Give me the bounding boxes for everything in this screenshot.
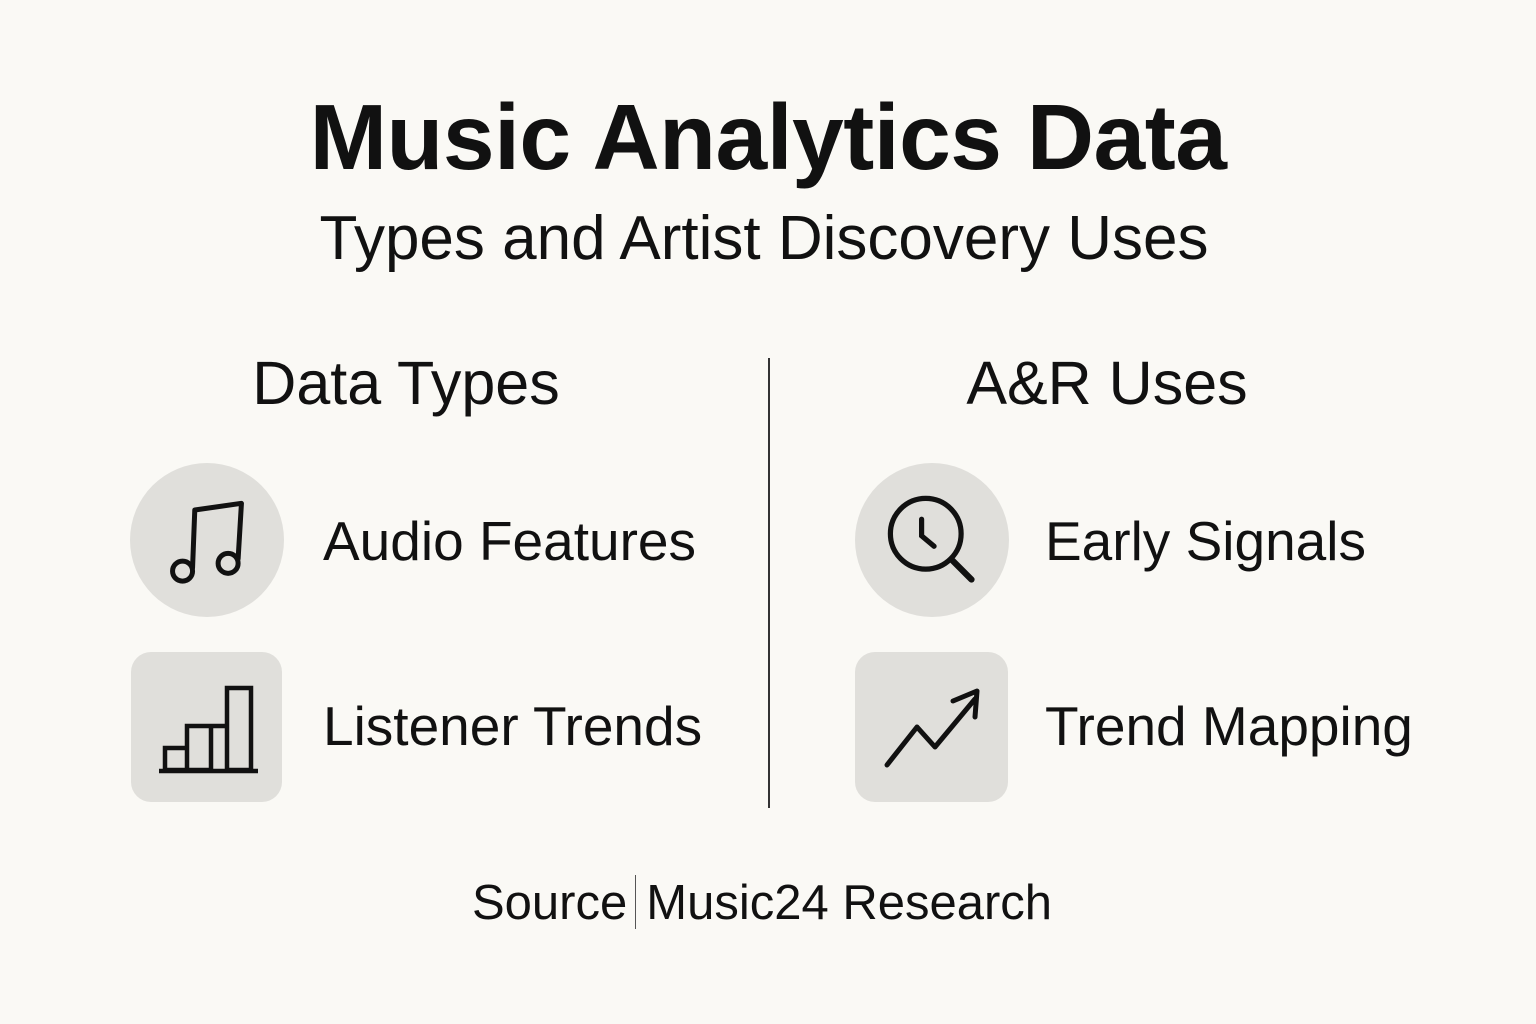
heading: A&R uses: A&R Uses xyxy=(966,349,1248,417)
item: early signals xyxy=(855,463,1366,617)
subtitle: Types and Artist Discovery Uses xyxy=(320,204,1208,273)
heading: data types: Data Types xyxy=(252,349,560,417)
label: Audio Features xyxy=(323,510,696,572)
icon: trend arrow xyxy=(855,652,1008,802)
item: audio features xyxy=(130,463,696,617)
icon: clock magnifier xyxy=(855,463,1009,617)
title: Music Analytics Data xyxy=(310,85,1226,189)
label: Early Signals xyxy=(1045,510,1366,572)
icon: bar chart xyxy=(131,652,282,802)
label: Trend Mapping xyxy=(1045,695,1413,757)
item: listener trends xyxy=(131,652,702,802)
item: trend mapping xyxy=(855,652,1413,802)
icon: music note xyxy=(130,463,284,617)
label: Listener Trends xyxy=(323,695,702,757)
divider xyxy=(768,358,770,808)
source line: Source Music24 Research xyxy=(472,876,1052,930)
